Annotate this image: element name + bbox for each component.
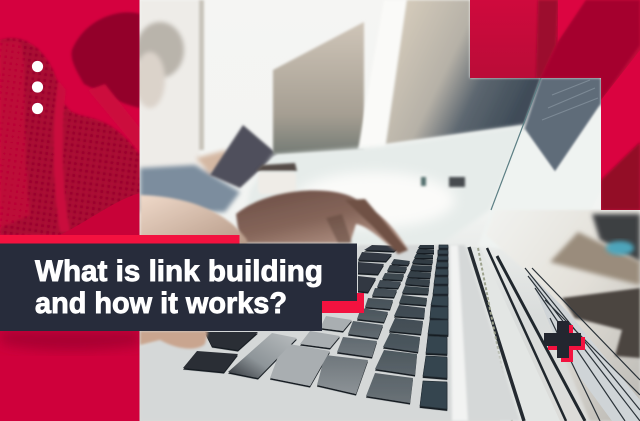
desk objects — [421, 177, 465, 187]
keyboard keys — [183, 245, 448, 409]
laptop screen lines — [542, 80, 598, 120]
background book — [210, 125, 277, 188]
title text: What is link building — [35, 255, 323, 288]
silhouette head — [72, 12, 140, 108]
coffee cup — [256, 163, 297, 194]
monitor one — [273, 22, 364, 155]
laptop edge line — [491, 78, 541, 210]
silhouette arm — [60, 193, 140, 236]
typing hand — [236, 190, 408, 254]
wall and pillar — [140, 0, 204, 170]
red accent bar above title — [0, 235, 240, 244]
lower shadow — [0, 331, 140, 421]
title text — [35, 255, 323, 320]
silhouette shirt — [0, 38, 140, 235]
red panel: top right — [470, 0, 640, 210]
dark upper keys — [358, 245, 400, 292]
screen reflection — [486, 210, 640, 421]
laptop bezel — [478, 105, 601, 250]
background person — [135, 22, 240, 212]
dark left keys — [183, 332, 258, 372]
desk bright patch — [295, 172, 455, 228]
third column keys — [317, 259, 410, 394]
red panel: left — [0, 0, 140, 421]
monitor two — [386, 0, 541, 144]
finger below title bar — [140, 331, 208, 349]
bright sash — [558, 0, 586, 42]
title banner — [0, 244, 357, 331]
laptop hinge — [465, 247, 585, 421]
bright monitor stand — [358, 0, 406, 150]
red accent block beside title — [322, 293, 364, 313]
left hand fingers — [140, 195, 247, 244]
bright right strip — [601, 50, 640, 185]
dark column — [536, 0, 558, 78]
lower left keys — [270, 316, 352, 386]
lower dark strip — [601, 142, 640, 210]
desk — [240, 125, 526, 245]
dark sweep — [541, 0, 640, 100]
second column keys — [366, 245, 434, 403]
plus icon — [544, 321, 585, 362]
laptop body — [140, 245, 520, 421]
keyboard highlight — [450, 245, 468, 421]
title text: and how it works? — [35, 287, 287, 320]
menu dots icon — [32, 61, 43, 114]
large space-bar key — [228, 333, 297, 378]
right column keys — [420, 245, 448, 409]
laptop screen — [524, 78, 601, 172]
